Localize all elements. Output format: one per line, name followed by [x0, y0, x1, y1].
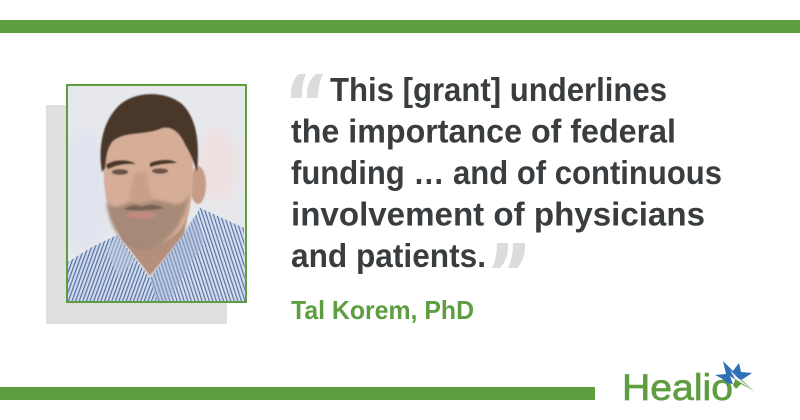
- stubble beard: [106, 192, 190, 249]
- quote text: This [grant] underlines: [330, 71, 667, 108]
- top green bar: [0, 20, 800, 33]
- photo: portrait of Tal Korem: [63, 85, 246, 302]
- ear: [190, 166, 206, 204]
- hair: [101, 94, 198, 172]
- lips: [127, 211, 157, 219]
- icon: star: [715, 361, 754, 391]
- eyes: [112, 169, 128, 175]
- attribution: Tal Korem, PhD: [291, 295, 474, 325]
- quote text: involvement of physicians: [291, 196, 705, 232]
- quote text: [291, 71, 722, 274]
- quote text: the importance of federal: [291, 112, 676, 150]
- Healio logo: Healio: [622, 367, 733, 408]
- opening quotation mark: [291, 74, 323, 98]
- Healio logo: [622, 361, 754, 408]
- mustache: [124, 205, 164, 211]
- bottom green bar: [0, 387, 595, 400]
- shirt collar shadow: [106, 235, 135, 275]
- quote text: and patients.: [291, 237, 486, 274]
- face: [104, 126, 193, 247]
- shirt: [68, 208, 245, 301]
- nose shadow: [129, 172, 153, 203]
- quote text: funding … and of continuous: [291, 154, 722, 191]
- eyebrows: [106, 160, 136, 169]
- neck: [118, 205, 190, 276]
- closing quotation mark: [492, 243, 525, 268]
- grey offset panel: [46, 105, 227, 324]
